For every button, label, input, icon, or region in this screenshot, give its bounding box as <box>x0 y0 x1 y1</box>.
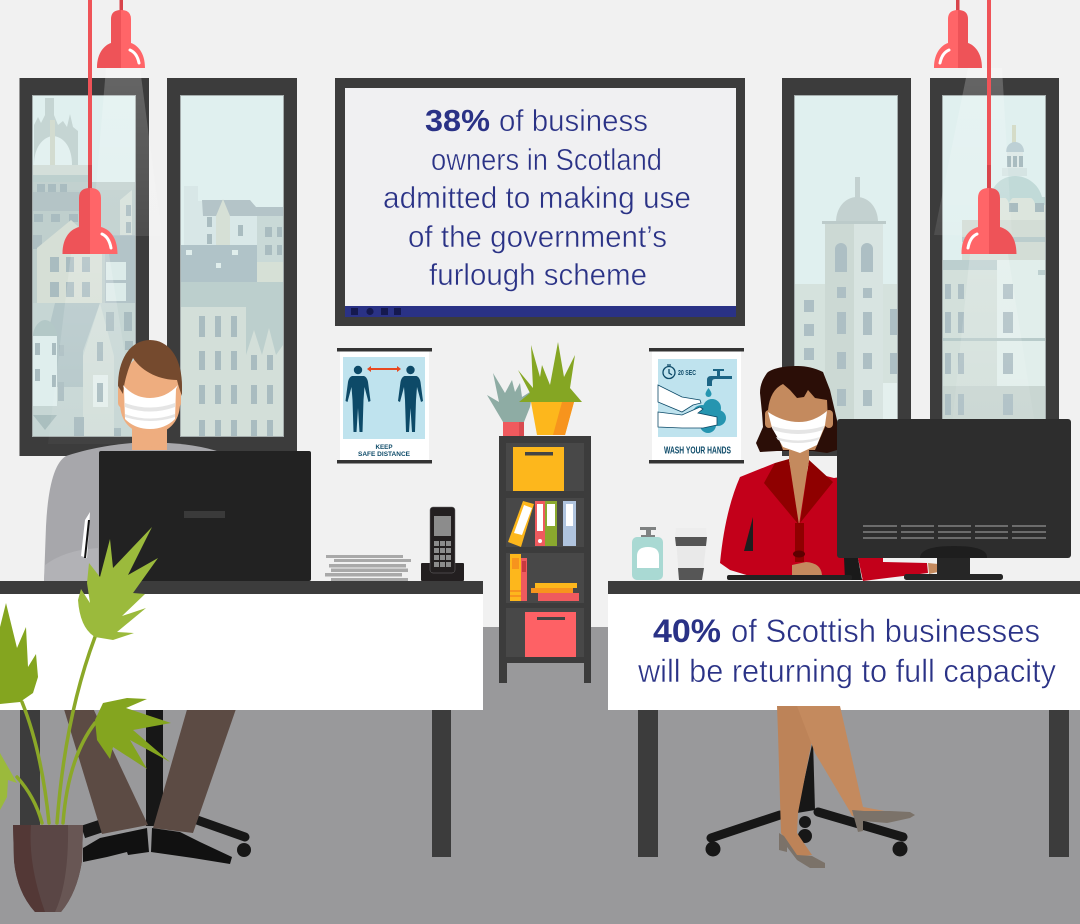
window 2 with city view <box>167 78 297 456</box>
floor <box>0 627 1080 924</box>
poster: keep safe distance: SAFE DISTANCE <box>358 451 410 458</box>
pot <box>13 825 83 912</box>
screen statistic text: furlough scheme <box>429 257 647 292</box>
woman's blouse <box>720 463 863 580</box>
desk statistic text: of Scottish businesses <box>731 613 1040 649</box>
woman's shoes <box>852 810 915 832</box>
poster: wash your hands <box>649 348 744 464</box>
desk statistic text: 40% <box>653 613 721 649</box>
wall screen <box>335 78 745 326</box>
right desk <box>608 581 1080 857</box>
screen statistic text: owners in Scotland <box>431 142 662 177</box>
pendant lamps <box>62 0 1016 254</box>
screen statistic text: of business <box>499 103 648 138</box>
screen statistic text <box>383 103 691 292</box>
man's shoes <box>83 828 149 862</box>
chair and man's legs <box>63 706 251 864</box>
wall background <box>0 0 1080 628</box>
lower-left leaf <box>0 753 17 810</box>
poster: keep safe distance <box>337 348 432 464</box>
woman's hair <box>756 366 837 453</box>
lamp top left <box>97 0 145 68</box>
shelf unit <box>499 436 591 683</box>
red storage box <box>525 612 576 657</box>
desk statistic text: will be returning to full capacity <box>637 653 1056 689</box>
light beams <box>48 68 1038 444</box>
books <box>510 554 579 601</box>
desk monitor <box>837 419 1071 580</box>
poster: keep safe distance: KEEP <box>376 444 392 451</box>
window 3 with city view <box>782 78 911 456</box>
woman in mask <box>720 366 938 581</box>
desk items <box>325 507 707 582</box>
hand sanitiser <box>632 527 663 580</box>
screen statistic text: admitted to making use <box>383 180 691 215</box>
man's head and hair <box>118 340 182 434</box>
desk statistic text <box>637 613 1056 689</box>
lamp lower right <box>962 0 1016 254</box>
left leaf <box>0 603 38 704</box>
coffee cup <box>675 528 707 580</box>
laptop <box>99 451 311 581</box>
woman's neck and face <box>765 384 833 462</box>
left desk <box>0 581 483 857</box>
screen statistic text: 38% <box>425 103 490 138</box>
cordless phone <box>421 507 464 581</box>
woman's legs and chair <box>706 706 915 868</box>
lamp lower left <box>62 0 118 254</box>
man's face mask <box>123 385 178 429</box>
window 4 with city view <box>930 78 1059 456</box>
poster: wash your hands: 20 SEC <box>678 370 696 377</box>
stems <box>17 637 95 823</box>
binders <box>508 501 576 547</box>
woman's face mask <box>768 411 827 453</box>
man's neck and shirt <box>44 443 238 581</box>
man in mask <box>44 340 238 581</box>
lamp top right <box>934 0 982 68</box>
poster: wash your hands: WASH YOUR HANDS <box>664 444 731 456</box>
floor plant <box>0 527 171 912</box>
stack of papers <box>325 555 411 582</box>
screen statistic text: of the government’s <box>408 219 667 254</box>
potted plants on shelf <box>487 342 582 436</box>
top leaf <box>78 527 158 640</box>
middle leaf <box>95 698 171 769</box>
yellow storage box <box>513 447 564 491</box>
window 1 with city view <box>20 78 149 456</box>
